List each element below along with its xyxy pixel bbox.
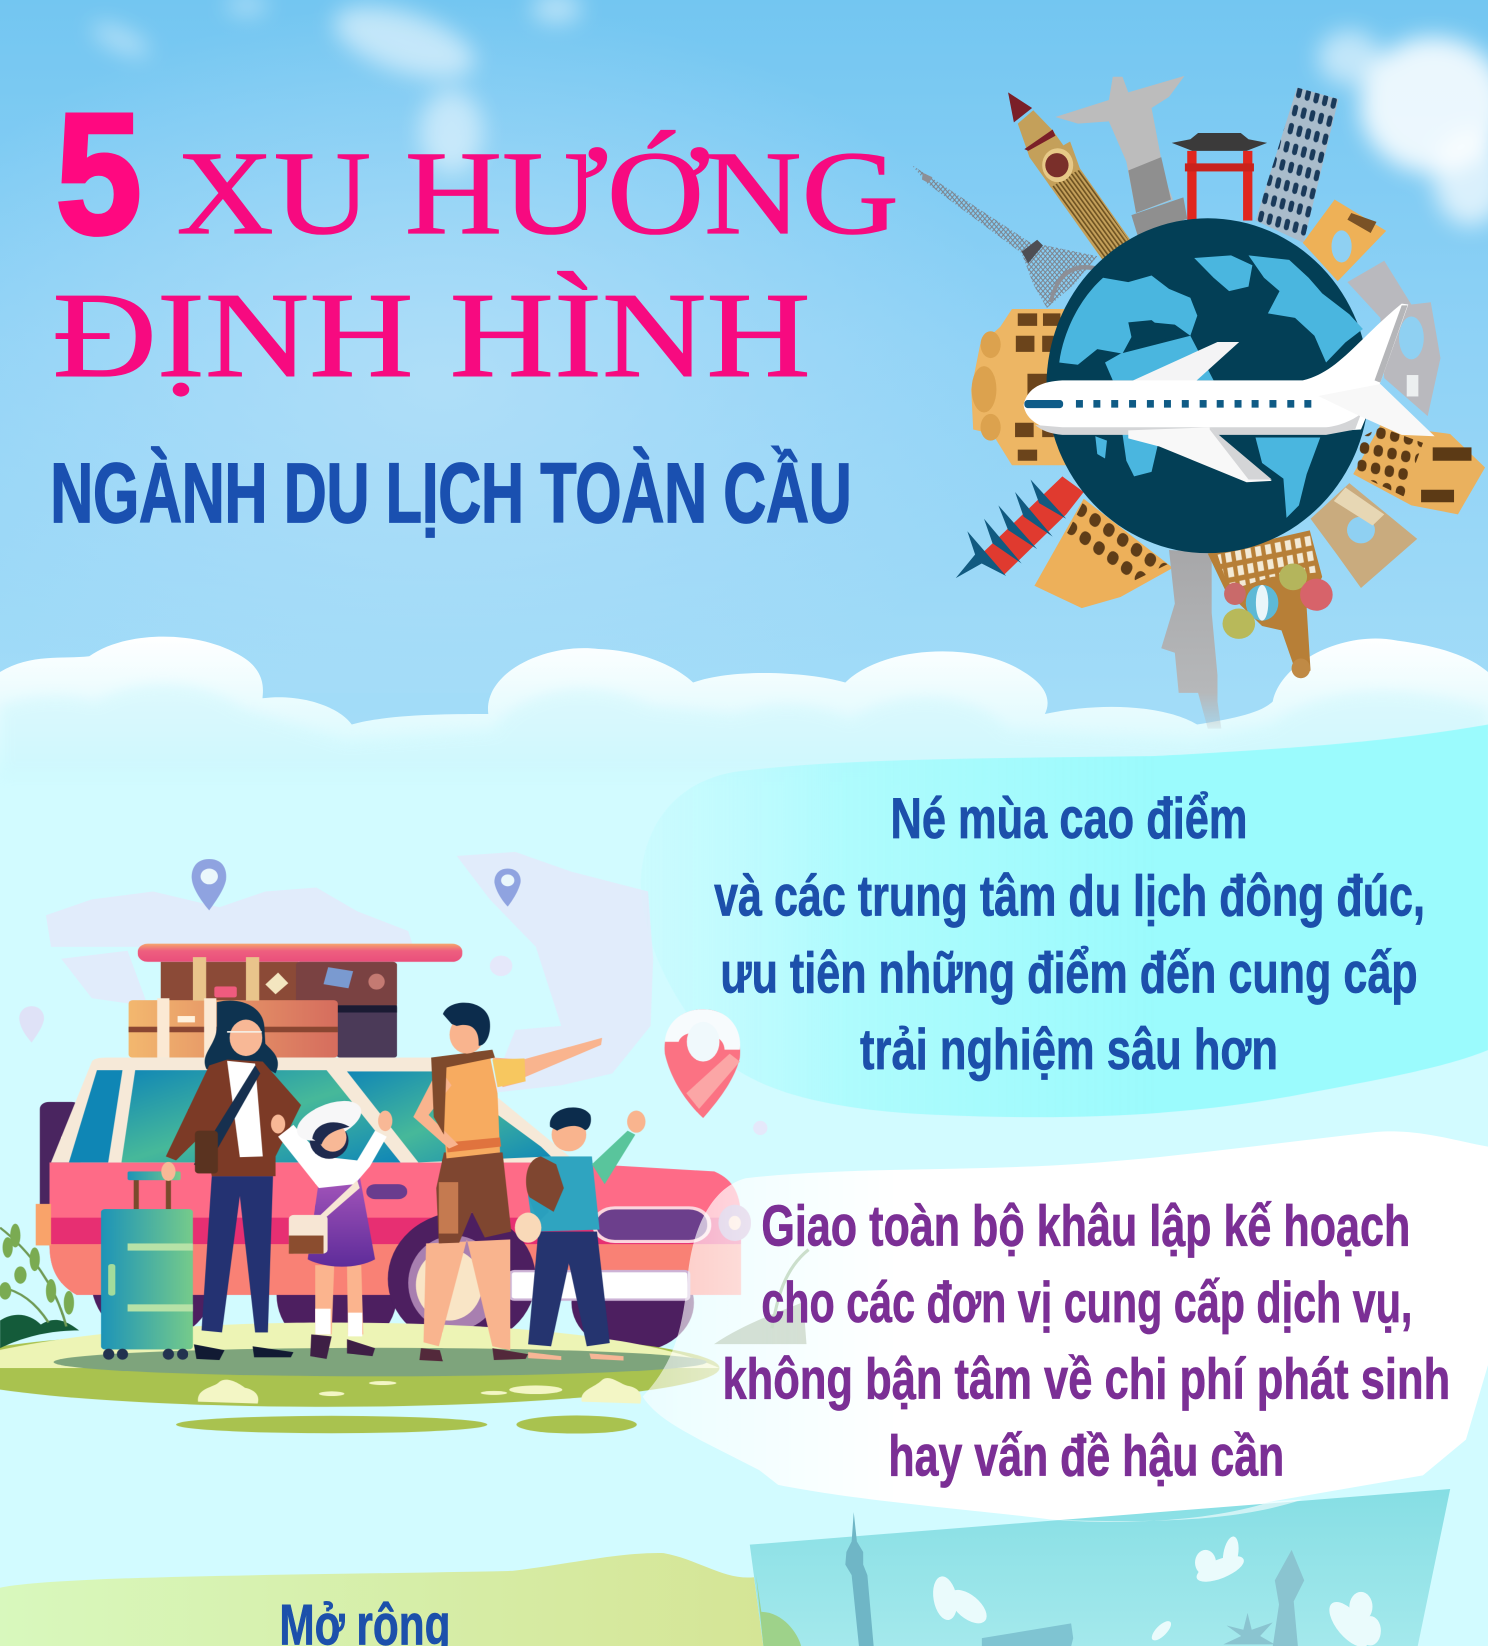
title line: XU HƯỚNG: XU HƯỚNG (176, 126, 899, 259)
landmark: Big Ben (1008, 92, 1130, 261)
figure: girl (271, 1093, 392, 1359)
panel: green blob (0, 1553, 763, 1646)
icon: hot air balloons (1223, 563, 1333, 639)
title number 5: 5 (56, 78, 142, 270)
background world map (46, 852, 767, 1135)
panel: white text blob (643, 1131, 1488, 1522)
title line: ĐỊNH HÌNH: ĐỊNH HÌNH (53, 268, 811, 403)
landmark: leaning tower (1255, 87, 1338, 243)
landmark: grey arches (1347, 261, 1440, 416)
landmark: torii gate (1172, 133, 1267, 221)
icon: airplane (1024, 304, 1435, 482)
ground (0, 1323, 719, 1434)
text block: purple message (722, 1194, 1450, 1488)
icon: red location pin (665, 1009, 740, 1118)
icon: globe (1046, 218, 1369, 553)
illustration: globe with landmarks and plane (912, 76, 1485, 729)
landmark: domed palace (971, 309, 1066, 465)
car (36, 1058, 751, 1352)
landmark: beige arch (1311, 483, 1417, 588)
landmark: liberty silhouette (1223, 1550, 1304, 1646)
plant: faded foliage behind blob (714, 1250, 809, 1344)
illustration: family with car (0, 852, 767, 1434)
figure: mother (161, 1000, 301, 1360)
panel: landmark postcard (750, 1489, 1450, 1646)
title (50, 78, 899, 540)
plant: left foliage (0, 1224, 79, 1348)
panel: cyan text blob (641, 725, 1488, 1117)
landmark: statue of liberty (1161, 550, 1221, 729)
text block: blue message (714, 787, 1425, 1082)
wispy sky clouds (88, 0, 1488, 226)
landmark: pagoda (956, 476, 1084, 578)
icon: blue pin (192, 859, 226, 910)
suitcase (101, 1171, 193, 1360)
landmark: Eiffel tower (912, 165, 1097, 308)
icon: small white clouds (930, 1535, 1381, 1646)
landmark: Christ statue (1055, 76, 1187, 237)
car roof rack (138, 944, 462, 962)
panel: green blob edge (756, 1575, 801, 1646)
figure: father (413, 1003, 602, 1361)
figure: boy (515, 1107, 645, 1360)
text block: purple message: hay vấn đề hậu cần (888, 1424, 1284, 1488)
landmark: gold arch (1303, 200, 1386, 281)
text block: blue message: Né mùa cao điểm (890, 787, 1248, 851)
icon: small blue pin (494, 869, 521, 907)
luggage stack (129, 957, 397, 1058)
landmark: gold cathedral (1353, 425, 1485, 514)
text block: blue message: trải nghiệm sâu hơn (860, 1018, 1278, 1082)
landmark: temple silhouette (982, 1623, 1073, 1646)
landmark: tower silhouette (845, 1512, 874, 1646)
landmark: colosseum (1034, 499, 1173, 608)
subtitle: NGÀNH DU LỊCH TOÀN CẦU (50, 446, 852, 540)
cloud band (0, 637, 1488, 777)
icon: faint pin (19, 1006, 44, 1043)
landmark: old town buildings (1208, 530, 1322, 678)
